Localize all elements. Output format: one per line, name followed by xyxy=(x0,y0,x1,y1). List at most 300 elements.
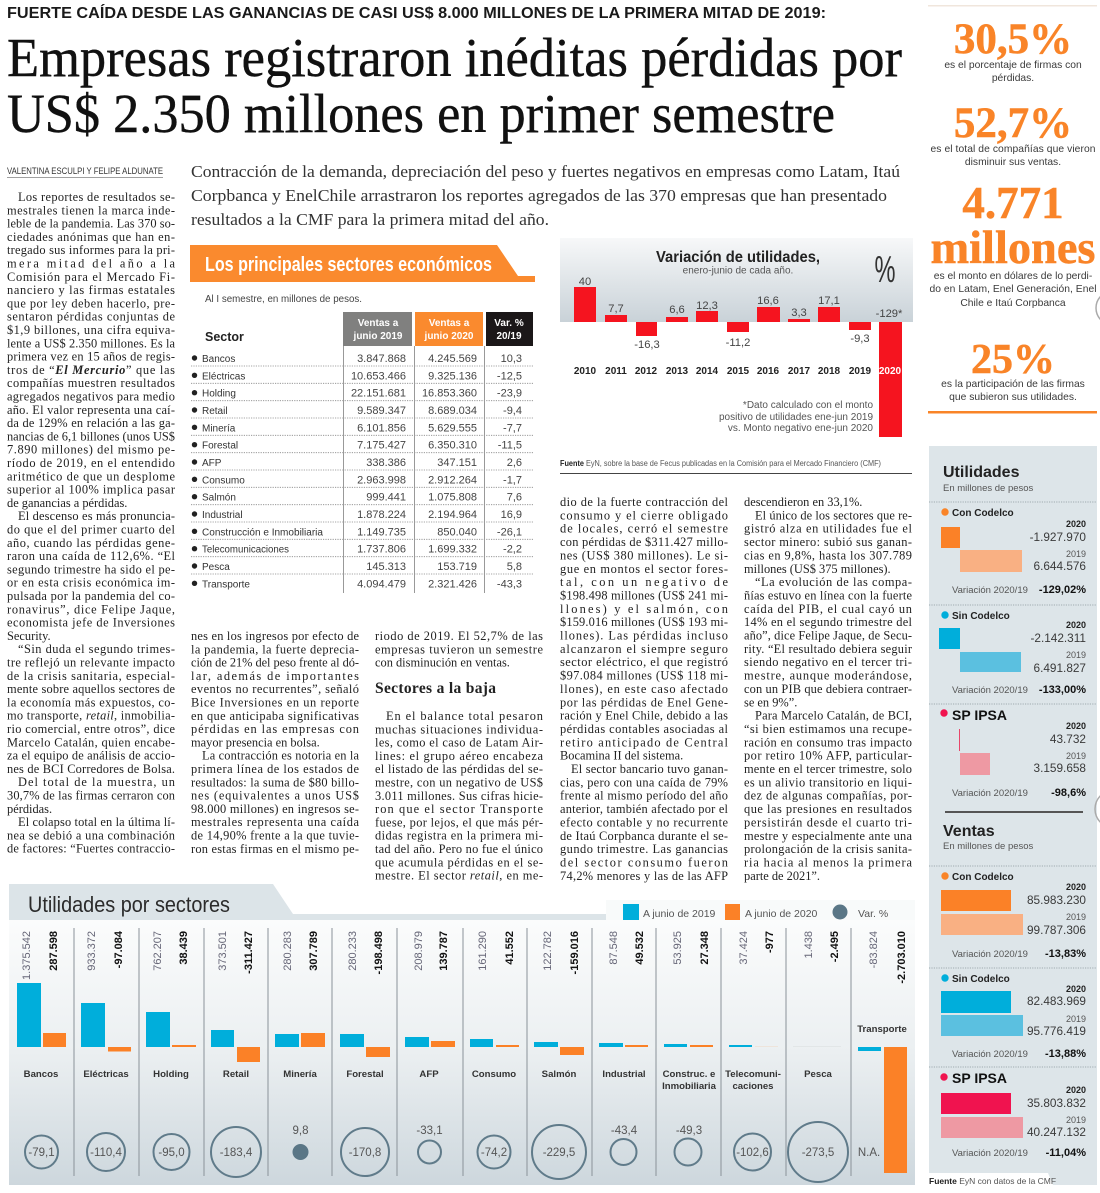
row: Salmón: 1.075.808 xyxy=(428,492,477,504)
article column 4: efecto contable y no recurrente xyxy=(560,815,728,829)
row: Retail: Retail xyxy=(202,406,228,417)
table banner xyxy=(190,245,535,282)
article column 3: lines: el grupo aéreo encabeza xyxy=(375,749,544,763)
article column 1: Comisión para el Mercado Fi- xyxy=(7,270,175,284)
figure 25% xyxy=(941,337,1085,403)
row: Forestal xyxy=(202,440,522,452)
bar chart: 3,3 xyxy=(791,307,807,319)
bar chart: 12,3 xyxy=(696,300,718,312)
sector: AFP xyxy=(405,931,455,1164)
article column 2: nes en los ingresos por efecto de xyxy=(191,629,360,643)
article column 1: Security. xyxy=(7,629,51,643)
row: Telecomunicaciones: -2,2 xyxy=(503,544,522,556)
utilidades: con Codelco: 2020 xyxy=(1066,519,1086,529)
article column 1: ciedades anónimas que han en- xyxy=(7,230,175,244)
article column 5: mestre y especialmente ante una xyxy=(744,829,912,843)
row: Forestal: 6.350.310 xyxy=(428,440,477,452)
row: Bancos: Bancos xyxy=(202,354,235,365)
ventas: SP IPSA: 2020 xyxy=(1066,1085,1086,1095)
figure 4.771 millones: do en Latam, Enel Generación, Enel xyxy=(930,284,1096,295)
row: Telecomunicaciones: 1.737.806 xyxy=(357,544,406,556)
bar chart: 2012 xyxy=(635,366,658,377)
article column 4: ración y Enel Chile, debido a las xyxy=(560,709,728,723)
row: Bancos: 10,3 xyxy=(501,353,522,365)
sector: Industrial: -43,4 xyxy=(611,1125,638,1137)
article column 5: “La evolución de las compa- xyxy=(755,575,912,589)
utilidades: sin Codelco: 2020 xyxy=(1066,620,1086,630)
article column 1: agregados negativos para medio xyxy=(7,390,175,404)
bar chart: 17,1 xyxy=(818,295,840,307)
utilidades heading: En millones de pesos xyxy=(943,483,1034,494)
figure 4.771 millones: millones xyxy=(930,222,1096,274)
utilidades: SP IPSA: 2019 xyxy=(1066,751,1086,761)
sector: Pesca xyxy=(788,931,848,1182)
figure 52,7% xyxy=(930,100,1096,168)
article column 5: caída del PIB, el cual cayó un xyxy=(744,602,912,616)
sector: Pesca: -273,5 xyxy=(802,1147,834,1159)
bar chart: 2020 xyxy=(879,366,902,377)
table header: Sector xyxy=(205,330,244,344)
section title: Utilidades por sectores xyxy=(28,892,230,917)
article column 3: muchas situaciones individua- xyxy=(375,722,543,736)
sector: Industrial: 87.548 xyxy=(608,931,620,965)
article column 4: anterior, también afectado por el xyxy=(560,802,729,816)
row: Consumo: -1,7 xyxy=(503,474,522,486)
row: Minería: Minería xyxy=(202,423,236,434)
row: Minería xyxy=(202,422,522,434)
row: Construcción e Inmobiliaria: 850.040 xyxy=(437,526,477,538)
sector: Holding xyxy=(146,931,196,1170)
utilidades: con Codelco: 2019 xyxy=(1066,549,1086,559)
article column 3: didas registra en la primera mi- xyxy=(375,829,543,843)
row: AFP: 347.151 xyxy=(437,457,477,469)
article column 1: El descenso es más pronuncia- xyxy=(18,509,175,523)
article column 4: del sector consumo fueron xyxy=(560,856,728,870)
article column 5: rity. “El resultado debiera seguir xyxy=(744,642,913,656)
row: Holding: 16.853.360 xyxy=(422,388,477,400)
row: Eléctricas: 9.325.136 xyxy=(428,370,477,382)
article column 2: 98.000 millones) en ingresos se- xyxy=(191,802,359,816)
row: Consumo: Consumo xyxy=(202,475,245,486)
title xyxy=(7,27,902,144)
article column 1: tregado sus informes para la pri- xyxy=(7,243,175,257)
sector: Telecomunicaciones: 37.424 xyxy=(738,931,750,965)
article column 4 xyxy=(560,495,729,883)
table banner: Los principales sectores económicos xyxy=(205,254,492,276)
legend: Var. % xyxy=(858,908,888,920)
sector: Industrial: 49.532 xyxy=(634,931,646,965)
ventas: con Codelco: 99.787.306 xyxy=(1027,923,1086,937)
chart footnote xyxy=(719,400,873,434)
article column 1: de la crisis sanitaria, especial- xyxy=(7,669,175,683)
article column 4: tal, con un negativo de xyxy=(560,575,728,589)
article column 1: El colapso total en la última lí- xyxy=(18,815,175,829)
article column 4: frente al mismo período del año xyxy=(560,789,728,803)
article column 1: or en esta crisis económica im- xyxy=(7,576,175,590)
row: Construcción e Inmobiliaria: Construcción e Inmobiliaria xyxy=(202,527,323,538)
utilidades heading xyxy=(943,464,1034,494)
figure 4.771 millones: 4.771 xyxy=(962,178,1064,228)
sector: Telecomunicaciones: Telecomuni- xyxy=(725,1069,781,1080)
figure 30,5%: pérdidas. xyxy=(992,73,1034,84)
article column 5: parte de 2021”. xyxy=(744,869,820,883)
chart footnote: vs. Monto negativo ene-jun 2020 xyxy=(728,423,873,434)
utilidades: SP IPSA: -98,6% xyxy=(1051,787,1086,799)
sector: AFP: 139.787 xyxy=(438,931,450,971)
table header: Var. % xyxy=(494,318,524,329)
article column 3: el listado de las pérdidas del se- xyxy=(375,762,543,776)
ventas: con Codelco: Variación 2020/19 xyxy=(952,949,1028,960)
utilidades: sin Codelco: 6.491.827 xyxy=(1034,661,1086,675)
article column 1: mo transporte, retail, inmobilia- xyxy=(7,709,175,723)
sector: Bancos: 1.375.542 xyxy=(21,931,33,980)
sector: Forestal: 280.233 xyxy=(347,931,359,971)
article column 4: $159.016 millones (US$ 193 mi- xyxy=(560,615,728,629)
ventas: sin Codelco: 95.776.419 xyxy=(1027,1024,1086,1038)
table header: 20/19 xyxy=(496,331,522,342)
panel: variación de utilidades chart xyxy=(560,238,913,474)
ventas: con Codelco: -13,83% xyxy=(1045,948,1086,960)
bar chart: 2014 xyxy=(696,366,719,377)
article column 2: en que anticipaba significativas xyxy=(191,709,359,723)
bar chart: -11,2 xyxy=(726,337,750,349)
sector: Industrial xyxy=(599,931,648,1165)
row: Eléctricas: 10.653.466 xyxy=(351,370,406,382)
article column 1: que por ley deben hacerlo, pre- xyxy=(7,296,175,310)
article column 5: siendo negativo en el tercer tri- xyxy=(744,655,912,669)
utilidades: SP IPSA: 43.732 xyxy=(1050,732,1086,746)
row: Bancos: 4.245.569 xyxy=(428,353,477,365)
sector: Transporte: -2.703.010 xyxy=(896,931,908,984)
ventas: con Codelco xyxy=(941,872,1086,960)
sector: Minería: 280.283 xyxy=(282,931,294,971)
row: Pesca: 5,8 xyxy=(507,561,522,573)
sector: Minería: 9,8 xyxy=(292,1125,308,1137)
article column 1: mente sobre aquellos sectores de xyxy=(7,682,176,696)
row: Holding: -23,9 xyxy=(497,388,522,400)
article column 4: El sector bancario tuvo ganan- xyxy=(571,762,728,776)
article column 5: El único de los sectores que re- xyxy=(755,508,912,522)
row: AFP: AFP xyxy=(202,458,222,469)
bar chart: 2011 xyxy=(605,366,627,377)
article column 5: dez de algunas compañías, por- xyxy=(744,789,912,803)
ventas: SP IPSA: 35.803.832 xyxy=(1027,1096,1086,1110)
ventas heading: En millones de pesos xyxy=(943,841,1034,852)
row: AFP: 338.386 xyxy=(366,457,406,469)
sector: Telecomunicaciones: -102,6 xyxy=(736,1147,769,1159)
deck xyxy=(191,162,900,229)
article column 2: primera línea de los estados de xyxy=(191,762,360,776)
utilidades: con Codelco: -129,02% xyxy=(1039,584,1086,596)
row: AFP: 2,6 xyxy=(507,457,522,469)
article column 1: Marcelo Catalán, quien encabe- xyxy=(7,735,175,749)
article column 5: descendieron en 33,1%. xyxy=(744,495,862,509)
figure 52,7%: disminuir sus ventas. xyxy=(965,157,1061,168)
article column 5: sector minero: subió sus ganan- xyxy=(744,535,912,549)
bar chart: 40 xyxy=(579,276,591,288)
row: Consumo xyxy=(202,474,522,486)
chart footnote: *Dato calculado con el monto xyxy=(743,400,873,411)
row: Forestal: -11,5 xyxy=(498,440,522,452)
article column 1: nes de BCI Corredores de Bolsa. xyxy=(7,762,175,776)
article column 1: lente a US$ 2.350 millones. Es la xyxy=(7,336,176,350)
row: Retail: 8.689.034 xyxy=(428,405,477,417)
sector: Telecomunicaciones: -977 xyxy=(764,931,776,953)
row: Eléctricas: -12,5 xyxy=(497,370,522,382)
article column 1: de ganancias a pérdidas. xyxy=(7,496,127,510)
row: Transporte xyxy=(202,578,522,590)
legend xyxy=(623,904,888,920)
deck: Corpbanca y EnelChile arrastraron los reportes agregados de las 370 empresas que han presentado xyxy=(191,186,887,205)
article column 2 xyxy=(191,629,360,856)
row: Retail: -9,4 xyxy=(503,405,522,417)
sector: Retail: -183,4 xyxy=(220,1147,253,1159)
row: Construcción e Inmobiliaria xyxy=(202,526,522,538)
sector: Holding: Holding xyxy=(153,1069,189,1080)
article column 1: pulsada por la pandemia del co- xyxy=(7,589,175,603)
panel: key figures xyxy=(928,5,1097,414)
bar chart: -129* xyxy=(876,308,903,320)
sector: Transporte xyxy=(857,931,908,1173)
row: Construcción e Inmobiliaria: -26,1 xyxy=(497,526,522,538)
chart title: enero-junio de cada año. xyxy=(683,266,793,276)
article column 1: sentaron pérdidas conjuntas de xyxy=(7,310,176,324)
ventas: SP IPSA xyxy=(940,1070,1086,1159)
figure 4.771 millones: Chile e Itaú Corpbanca xyxy=(960,298,1066,309)
sector: Telecomunicaciones xyxy=(725,931,781,1170)
article column 4: con pérdidas de $311.427 millo- xyxy=(560,535,728,549)
article column 1: do que el del primer cuarto del xyxy=(7,522,176,536)
ventas: con Codelco: 2020 xyxy=(1066,882,1086,892)
table header xyxy=(205,312,533,346)
article column 5: cias en 9,8%, hasta los 307.789 xyxy=(744,548,912,562)
article column 1: segundo trimestre ha sido el pe- xyxy=(7,562,175,576)
row: Telecomunicaciones: 1.699.332 xyxy=(428,544,477,556)
row: Forestal: 7.175.427 xyxy=(357,440,406,452)
article column 3: mestre. El sector retail, en me- xyxy=(375,869,543,883)
clipped circle marks at right edge xyxy=(1095,291,1100,828)
title: US$ 2.350 millones en primer semestre xyxy=(7,83,835,144)
title: Empresas registraron inéditas pérdidas por xyxy=(7,27,902,88)
article column 5: ria hacia al menos la primera xyxy=(744,856,912,870)
article column 1: leble de la pandemia. Las 370 so- xyxy=(7,217,175,231)
sector: Minería: Minería xyxy=(283,1069,317,1080)
article column 1: ronavirus”, dice Felipe Jaque, xyxy=(7,602,175,616)
ventas: sin Codelco: Variación 2020/19 xyxy=(952,1049,1028,1060)
ventas: SP IPSA: 2019 xyxy=(1066,1115,1086,1125)
chart title xyxy=(656,249,820,276)
article column 4: $97.084 millones (US$ 118 mi- xyxy=(560,669,728,683)
utilidades: con Codelco: -1.927.970 xyxy=(1030,530,1086,544)
sector: Salmón: -159.016 xyxy=(569,931,581,974)
row: Eléctricas: Eléctricas xyxy=(202,371,245,382)
article column 1: nea se debió a una combinación xyxy=(7,828,175,842)
percent symbol: % xyxy=(874,249,896,290)
bar chart xyxy=(574,276,903,437)
figure 25%: es la participación de las firmas xyxy=(941,379,1085,390)
article column 4: dio de la fuerte contracción del xyxy=(560,495,729,509)
article column 5: gistró alza en utilidades fue el xyxy=(744,522,913,536)
article column 5: millones (US$ 375 millones). xyxy=(744,562,891,576)
sector: Consumo xyxy=(470,931,519,1168)
bar chart: 2017 xyxy=(788,366,811,377)
byline: VALENTINA ESCULPI Y FELIPE ALDUNATE xyxy=(7,166,163,176)
row: Forestal: Forestal xyxy=(202,441,238,452)
article column 5: mestre, aunque moderándose, xyxy=(744,669,912,683)
sector: Forestal xyxy=(340,931,390,1176)
article column 4: sector eléctrico, el que registró xyxy=(560,655,728,669)
article column 3: 3.011 millones. Sus cifras hicie- xyxy=(375,789,543,803)
row: Transporte: 2.321.426 xyxy=(428,578,477,590)
sector: Industrial: Industrial xyxy=(602,1069,646,1080)
sector: Transporte: N.A. xyxy=(858,1147,880,1159)
ventas: sin Codelco: 2020 xyxy=(1066,984,1086,994)
utilidades: SP IPSA: 3.159.658 xyxy=(1034,761,1086,775)
kicker: FUERTE CAÍDA DESDE LAS GANANCIAS DE CASI US$ 8.000 MILLONES DE LA PRIMERA MITAD DE 2019: xyxy=(7,3,826,22)
sector: Bancos xyxy=(17,931,66,1168)
bar chart: 16,6 xyxy=(757,295,779,307)
sector: Minería xyxy=(275,931,325,1160)
sector: Pesca: 1.438 xyxy=(803,931,815,959)
deck: resultados a la CMF para la primera mitad del año. xyxy=(191,210,549,229)
article column 5: se en 9%”. xyxy=(744,695,797,709)
row: Pesca: Pesca xyxy=(202,562,230,573)
sector: Salmón: 122.782 xyxy=(542,931,554,971)
sector: Holding: 762.207 xyxy=(152,931,164,971)
bar chart: 7,7 xyxy=(608,303,624,315)
row: Salmón: 7,6 xyxy=(507,492,522,504)
utilidades: sin Codelco: 2019 xyxy=(1066,650,1086,660)
article column 1: año, cuando las pérdidas gene- xyxy=(7,536,175,550)
article column 2: nes (equivalentes a unos US$ xyxy=(191,789,359,803)
article column 3: tad del año. Pero no fue el único xyxy=(375,842,543,856)
sector: Salmón: -229,5 xyxy=(543,1147,575,1159)
row: Salmón xyxy=(202,492,522,504)
article column 5: con un PIB que debiera contraer- xyxy=(744,682,912,696)
subheading: Sectores a la baja xyxy=(375,680,496,697)
figure 30,5%: 30,5% xyxy=(954,16,1072,63)
ventas: con Codelco: 85.983.230 xyxy=(1027,893,1086,907)
article column 5: 14% en el segundo trimestre del xyxy=(744,615,913,629)
sector: Holding: -95,0 xyxy=(158,1147,185,1159)
article column 1: Los reportes de resultados se- xyxy=(18,190,175,204)
row: Retail: 9.589.347 xyxy=(357,405,406,417)
article column 2: pérdidas en las empresas con xyxy=(191,722,359,736)
row: Minería: 6.101.856 xyxy=(357,422,406,434)
sector: AFP: 208.979 xyxy=(413,931,425,971)
ventas: SP IPSA: Variación 2020/19 xyxy=(952,1148,1028,1159)
table header: Ventas a xyxy=(429,318,470,329)
utilidades: sin Codelco: Variación 2020/19 xyxy=(952,685,1028,696)
figure 30,5%: es el porcentaje de firmas con xyxy=(944,60,1082,71)
bar chart: -9,3 xyxy=(850,333,870,345)
article column 3: fuese, por lejos, el que más pér- xyxy=(375,815,543,829)
ventas: sin Codelco: 2019 xyxy=(1066,1014,1086,1024)
row: Industrial: 16,9 xyxy=(501,509,522,521)
article column 4: Bocamina II del sistema. xyxy=(560,749,683,763)
chart title: Variación de utilidades, xyxy=(656,249,820,266)
article column 3: les, como el caso de Latam Air- xyxy=(375,736,543,750)
row: Bancos: 3.847.868 xyxy=(357,353,406,365)
ventas: con Codelco: Con Codelco xyxy=(952,872,1014,883)
utilidades: SP IPSA: 2020 xyxy=(1066,721,1086,731)
sector: Construcción e Inmobiliaria: Construc. e xyxy=(663,1069,715,1080)
article column 4: gundo trimestre. Las ganancias xyxy=(560,842,728,856)
article column 4: $198.498 millones (US$ 241 mi- xyxy=(560,588,728,602)
figure 30,5% xyxy=(944,16,1082,84)
article column 4: de locales, cerró el semestre xyxy=(560,522,728,536)
table header: junio 2020 xyxy=(424,331,474,342)
article column 1: 30,7% de las firmas cerraron con xyxy=(7,788,175,802)
sector: Retail: -311.427 xyxy=(243,931,255,974)
bar chart: 2019 xyxy=(849,366,872,377)
row: Industrial xyxy=(202,509,522,521)
article column 1: ríodo de 2019, en el entendido xyxy=(7,456,175,470)
sector: Consumo: 161.290 xyxy=(477,931,489,971)
article column 1 xyxy=(7,190,176,856)
article column 2: mayor presencia en bolsa. xyxy=(191,735,320,749)
article column 4: por las pérdidas de Enel Gene- xyxy=(560,695,728,709)
sector: Consumo: -74,2 xyxy=(481,1147,507,1159)
article column 1: nancias de 6,1 billones (unos US$ xyxy=(7,429,175,443)
sector: Minería: 307.789 xyxy=(308,931,320,971)
ventas: sin Codelco: -13,88% xyxy=(1045,1048,1086,1060)
article column 1: mera mitad del año a la xyxy=(7,256,176,270)
article column 5: año”, dice Felipe Jaque, de Secu- xyxy=(744,628,912,642)
sector: Bancos: 287.598 xyxy=(48,931,60,971)
article column 2: de 14,90% frente a la que tuvie- xyxy=(191,828,359,842)
article column 3: mestre, con un negativo de US$ xyxy=(375,776,543,790)
article column 5: Para Marcelo Catalán, de BCI, xyxy=(755,709,912,723)
ventas: sin Codelco: Sin Codelco xyxy=(952,974,1010,985)
figure 52,7%: 52,7% xyxy=(954,100,1072,147)
article column 2: la pandemia, la fuerte deprecia- xyxy=(191,642,359,656)
utilidades: SP IPSA: SP IPSA xyxy=(952,707,1007,723)
article column 2: ron estas firmas en el mismo pe- xyxy=(191,842,359,856)
bar chart: -16,3 xyxy=(634,339,660,351)
ventas: sin Codelco: 82.483.969 xyxy=(1027,994,1086,1008)
article column 1: economista jefe de Inversiones xyxy=(7,616,175,630)
ventas: SP IPSA: 40.247.132 xyxy=(1027,1125,1086,1139)
table rows xyxy=(191,346,533,593)
row: Retail xyxy=(202,405,522,417)
ventas: sin Codelco xyxy=(941,974,1086,1060)
article column 4: llones). Las pérdidas incluso xyxy=(560,628,728,642)
sector: Construcción e Inmobiliaria xyxy=(662,931,717,1166)
sector: Holding: 38.439 xyxy=(178,931,190,965)
article column 1: la economía más expuestos, co- xyxy=(7,695,175,709)
article column 5: por retiro 10% AFP, particular- xyxy=(744,749,912,763)
article column 5: que las presiones en resultados xyxy=(744,802,912,816)
utilidades: sin Codelco: -2.142.311 xyxy=(1030,631,1086,645)
sector: Retail xyxy=(211,931,261,1177)
utilidades: con Codelco xyxy=(941,508,1086,596)
sector: Pesca: Pesca xyxy=(804,1069,833,1080)
article column 1: pérdidas. xyxy=(7,802,52,816)
utilidades: SP IPSA: Variación 2020/19 xyxy=(952,788,1028,799)
table header: junio 2019 xyxy=(353,331,403,342)
article column 4: de Itaú Corpbanca durante el se- xyxy=(560,829,728,843)
figure 52,7%: es el total de compañías que vieron xyxy=(930,144,1096,155)
sector: Salmón: Salmón xyxy=(542,1069,576,1080)
row: Transporte: Transporte xyxy=(202,579,250,590)
article column 5: persistirán desde el cuarto tri- xyxy=(744,815,912,829)
article column 4: retiro anticipado de Central xyxy=(560,735,729,749)
panel: utilidades por sectores xyxy=(9,884,915,1185)
sector: AFP: AFP xyxy=(419,1069,439,1080)
row: Salmón: Salmón xyxy=(202,493,236,504)
article column 2: lar, además de importantes xyxy=(191,669,359,683)
